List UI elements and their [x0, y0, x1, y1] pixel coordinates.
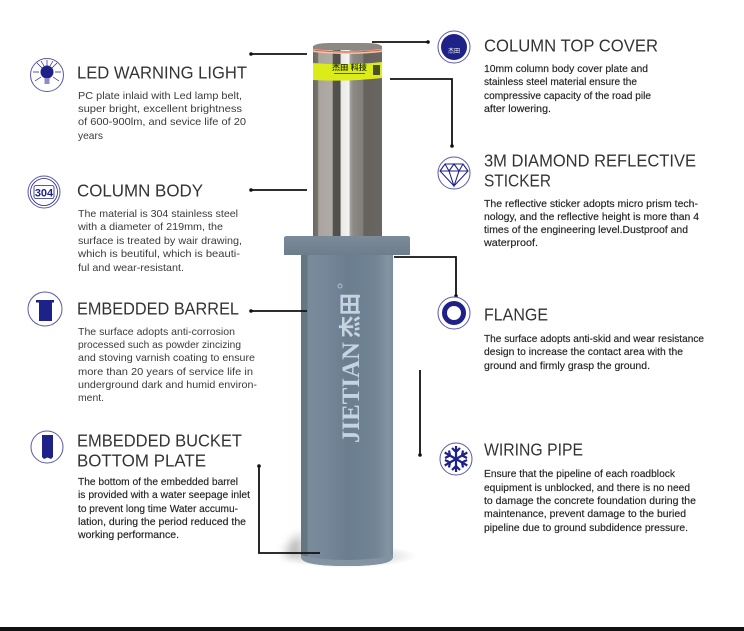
description: The surface adopts anti-corrosion	[78, 326, 235, 338]
section: column body	[28, 176, 242, 274]
barrel logo Chinese mark: 杰田	[333, 293, 365, 338]
description: ground and firmly grasp the ground.	[484, 360, 650, 372]
icon: 304 stainless badge	[28, 176, 60, 208]
heading: WIRING PIPE	[484, 440, 583, 460]
flange	[284, 236, 410, 255]
description: is provided with a water seepage inlet	[78, 489, 250, 501]
heading: COLUMN BODY	[77, 180, 203, 200]
description: The bottom of the embedded barrel	[78, 476, 238, 488]
description: compressive capacity of the road pile	[484, 90, 651, 102]
registered mark	[338, 284, 342, 288]
section: embedded bucket bottom plate	[31, 430, 250, 541]
description	[78, 90, 246, 142]
column top cover	[313, 43, 382, 50]
description: after lowering.	[484, 103, 551, 115]
description	[484, 63, 651, 115]
section: embedded barrel	[28, 292, 258, 404]
yellow reflective sticker	[313, 62, 382, 81]
description: The reflective sticker adopts micro prism tech-	[484, 198, 698, 210]
heading: 3M DIAMOND REFLECTIVE	[484, 150, 696, 170]
description: ment.	[78, 392, 104, 404]
description: The material is 304 stainless steel	[78, 208, 238, 220]
LED red line	[313, 50, 382, 52]
description: Ensure that the pipeline of each roadblock	[484, 468, 676, 480]
barrel bottom lip	[301, 555, 393, 566]
description: maintenance, prevent damage to the buried	[484, 508, 686, 520]
description: of 600-900lm, and sevice life of 20	[78, 116, 246, 128]
stainless column	[313, 46, 382, 236]
description: stainless steel material ensure the	[484, 76, 637, 88]
bottom black bar	[0, 627, 744, 631]
description	[77, 208, 242, 274]
icon: light bulb	[30, 58, 64, 92]
description: PC plate inlaid with Led lamp belt,	[78, 90, 242, 102]
description: waterproof.	[483, 237, 538, 249]
left wall shadow	[285, 533, 301, 555]
heading: LED WARNING LIGHT	[77, 62, 247, 82]
icon: top cover logo: 杰田	[448, 46, 460, 55]
description: with a diameter of 219mm, the	[77, 221, 223, 233]
description	[77, 476, 250, 541]
section: column top cover	[438, 31, 658, 115]
description	[484, 333, 704, 372]
icon: top cover logo	[438, 31, 470, 63]
description: super bright, excellent brightness	[78, 103, 242, 115]
icon: flange ring	[438, 297, 470, 329]
heading: FLANGE	[484, 304, 548, 324]
line to flange	[394, 257, 456, 296]
description: working performance.	[77, 529, 179, 541]
embedded barrel body	[301, 255, 393, 566]
description: nology, and the reflective height is more than 4	[484, 211, 699, 223]
description: design to increase the contact area with the	[484, 346, 683, 358]
description: years	[78, 130, 103, 142]
line to top cover	[372, 41, 428, 43]
description: equipment is unblocked, and there is no need	[484, 482, 690, 494]
description	[483, 198, 699, 249]
line to wiring pipe	[419, 370, 421, 455]
description: lation, during the period reduced the	[78, 516, 246, 528]
description: ful and wear-resistant.	[78, 262, 184, 274]
sticker small print	[334, 73, 365, 74]
line to LED	[251, 53, 307, 55]
description: pipeline due to ground subdidence pressure.	[484, 522, 688, 534]
line to barrel	[251, 310, 307, 312]
heading: EMBEDDED BARREL	[77, 298, 239, 318]
section: 3M diamond reflective sticker	[438, 150, 699, 249]
leader lines	[249, 40, 458, 553]
sticker QR code	[373, 65, 380, 75]
line to column body	[251, 189, 307, 191]
icon: 304 stainless badge: 304	[35, 188, 54, 200]
description: processed such as powder zincizing	[78, 339, 241, 351]
bollard illustration	[277, 43, 417, 568]
ground shadow	[277, 544, 417, 568]
icon: bucket	[31, 431, 63, 463]
line to sticker	[390, 79, 452, 146]
heading second line: BOTTOM PLATE	[77, 450, 206, 470]
description: and stoving varnish coating to ensure	[78, 352, 255, 364]
description	[484, 468, 696, 534]
section: LED warning light	[30, 58, 247, 142]
description: times of the engineering level.Dustproof and	[484, 224, 688, 236]
section: wiring pipe	[440, 440, 696, 534]
icon: barrel	[28, 292, 62, 326]
description: The surface adopts anti-skid and wear resistance	[484, 333, 704, 345]
icon: snowflake	[440, 443, 472, 475]
icon: diamond	[438, 157, 470, 189]
description	[78, 326, 258, 404]
barrel logo text: JIETIAN	[338, 342, 365, 443]
sticker brand text: 杰田 科技	[332, 62, 368, 72]
description: to prevent long time Water accumu-	[78, 503, 238, 515]
description: underground dark and humid environ-	[78, 379, 258, 391]
heading: EMBEDDED BUCKET	[77, 430, 242, 450]
line to bottom plate	[259, 466, 320, 553]
LED warning light band	[313, 49, 382, 54]
description: more than 20 years of service life in	[78, 366, 253, 378]
description: 10mm column body cover plate and	[484, 63, 648, 75]
description: surface is treated by wair drawing,	[78, 235, 242, 247]
heading second line: STICKER	[484, 170, 551, 190]
section: flange	[438, 297, 704, 372]
description: to damage the concrete foundation during the	[484, 495, 696, 507]
heading: COLUMN TOP COVER	[484, 36, 658, 56]
description: which is beutiful, which is beauti-	[77, 248, 241, 260]
